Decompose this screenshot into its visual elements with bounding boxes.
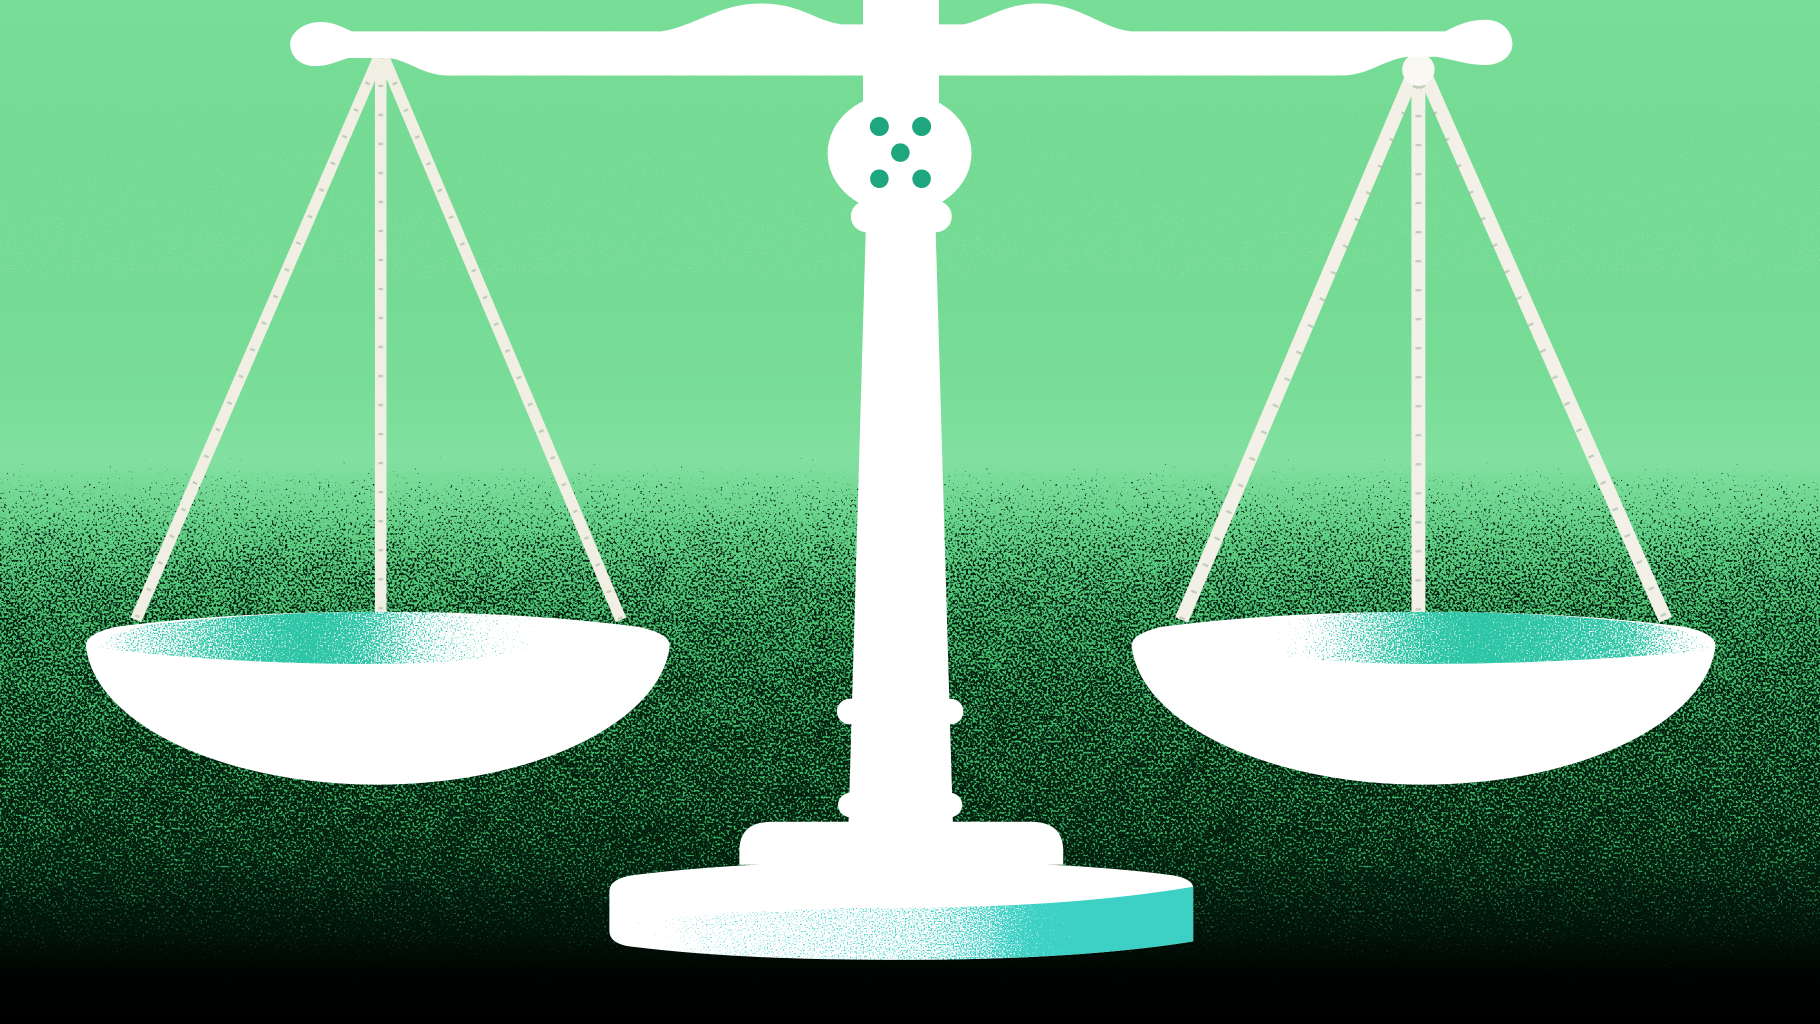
right pan xyxy=(1132,604,1716,785)
left pan xyxy=(86,604,670,785)
right chains xyxy=(1182,53,1666,620)
base xyxy=(609,822,1193,963)
beam xyxy=(290,3,1512,75)
column with knob and collars xyxy=(828,0,972,824)
left chains xyxy=(136,56,621,620)
knob dots xyxy=(870,117,931,188)
